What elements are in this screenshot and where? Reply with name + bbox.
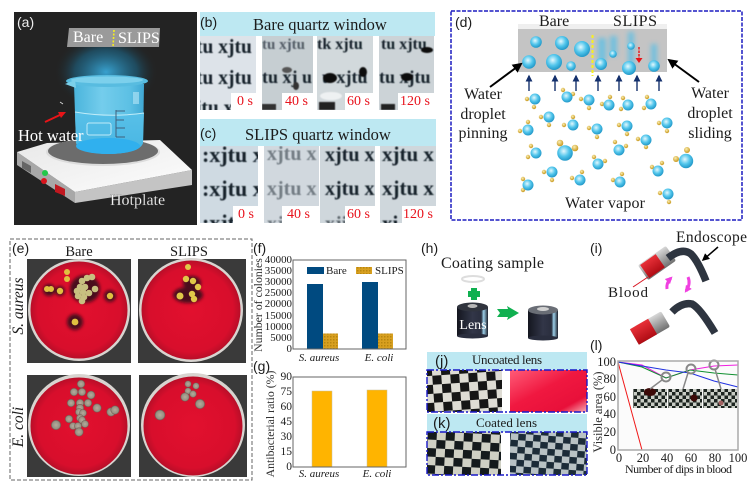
y ticks l: 0 <box>610 443 616 457</box>
label g: (g) <box>253 358 270 374</box>
hot water label: Hot water <box>18 126 84 145</box>
image 40 s <box>262 36 313 110</box>
y ticks l: 40 <box>604 407 616 421</box>
image 60 s <box>317 36 373 110</box>
panel k: coated lens views <box>427 414 587 475</box>
time labels b <box>231 93 434 110</box>
y ticks g: 75 <box>280 386 292 398</box>
row s. aureus: S. aureus <box>10 277 27 335</box>
panel g: antibacterial ratio bar chart <box>253 358 406 480</box>
x ticks l: 20 <box>637 451 649 465</box>
time labels c: 40 s <box>287 207 310 222</box>
coating sample title: Coating sample <box>441 255 544 272</box>
x ticks l: 60 <box>685 451 697 465</box>
time labels c <box>233 206 436 223</box>
legend f: SLIPS <box>375 265 404 277</box>
y ticks g: 45 <box>280 416 292 428</box>
x ticks l: 80 <box>709 451 721 465</box>
red arrow <box>45 102 66 122</box>
image 60 s: xjtu x <box>325 178 374 200</box>
slips label d: SLIPS <box>613 13 657 30</box>
blood label: Blood <box>608 285 648 301</box>
column bare: Bare <box>65 244 93 260</box>
green plus <box>468 288 480 300</box>
panel j: uncoated lens views <box>427 352 587 412</box>
axes g <box>293 377 406 467</box>
image 60 s: xjtu x <box>325 144 374 166</box>
lower endoscope <box>672 304 715 333</box>
y ticks l: 60 <box>604 390 616 404</box>
y ticks f: 35000 <box>265 265 293 277</box>
time labels b: 60 s <box>347 94 370 109</box>
panel b: bare quartz window <box>196 12 435 119</box>
y ticks g: 90 <box>280 371 292 383</box>
endoscope arrow <box>703 247 718 260</box>
sliding label: Water <box>691 85 729 102</box>
label c: (c) <box>200 125 216 141</box>
hotplate label: Hotplate <box>110 192 165 209</box>
label h: (h) <box>421 240 438 256</box>
panel h: coating a lens <box>421 240 558 340</box>
y ticks l: 100 <box>597 355 616 369</box>
x ticks l: 40 <box>661 451 673 465</box>
label f: (f) <box>253 240 266 256</box>
pinning label: droplet <box>460 106 506 123</box>
x ticks l: 0 <box>616 451 622 465</box>
checkerboard k right <box>510 432 587 475</box>
image 120 s: xjtu x <box>382 142 434 166</box>
bare slips window <box>67 28 160 47</box>
image 120 s <box>379 36 434 110</box>
y ticks f: 40000 <box>265 254 293 266</box>
x label aureus g: S. aureus <box>299 468 339 480</box>
uncoated lens: Lens <box>459 318 487 333</box>
row e. coli: E. coli <box>10 407 27 448</box>
header j <box>427 352 587 370</box>
image 120 s: tu xjtu <box>381 36 427 53</box>
image 0 s <box>196 36 256 119</box>
panel d: condensation schematic <box>451 11 742 220</box>
bars f <box>307 282 393 349</box>
header c <box>200 119 436 146</box>
x ticks l <box>616 451 747 465</box>
label i: (i) <box>590 240 602 256</box>
label b: (b) <box>200 14 217 30</box>
label l: (l) <box>590 337 602 353</box>
series lines <box>618 362 738 450</box>
image 0 s: :xjtu <box>202 210 247 235</box>
label j: (j) <box>435 353 448 370</box>
window <box>518 29 667 72</box>
image 0 s: :xjtu x <box>202 142 264 167</box>
magenta arrows <box>667 277 689 291</box>
image 0 s: tu xjtu <box>196 37 252 58</box>
window top strip <box>518 24 667 29</box>
x labels f: S. aureus <box>299 352 339 364</box>
time labels b: 120 s <box>400 94 430 109</box>
plot background <box>618 361 738 450</box>
image 40 s: xjtu x <box>267 178 316 200</box>
header k <box>427 414 587 432</box>
image 60 s <box>320 144 375 235</box>
time labels c: 120 s <box>403 207 433 222</box>
y ticks f: 15000 <box>265 310 293 322</box>
image 40 s: xjtu x <box>267 143 316 165</box>
endoscope title: Endoscope <box>676 229 747 246</box>
upper endoscope <box>668 251 706 281</box>
panel a: beaker on hotplate <box>14 12 197 225</box>
image 120 s <box>380 142 436 235</box>
panel f: number of colonies bar chart <box>251 240 406 364</box>
label k: (k) <box>433 415 450 432</box>
image 120 s: xi <box>382 211 398 235</box>
title k: Coated lens <box>476 415 537 430</box>
image 40 s: tu xjtu <box>262 37 305 53</box>
image 120 s: xjtu x <box>382 176 434 200</box>
pinning label: pinning <box>459 125 507 142</box>
image 0 s: itu x <box>196 98 234 119</box>
y ticks f: 25000 <box>265 287 293 299</box>
vapor arrows <box>529 76 659 91</box>
label e: (e) <box>12 240 29 256</box>
time labels c: 0 s <box>238 207 254 222</box>
x label coli g: E. coli <box>362 468 391 480</box>
image 0 s: :xjtu x <box>202 176 264 201</box>
bare slips window: Bare <box>73 29 103 46</box>
upper vial <box>638 246 676 280</box>
sliding label: droplet <box>687 105 733 122</box>
beaker <box>65 75 148 154</box>
frame l <box>618 361 738 450</box>
plate: aureus slips <box>138 258 246 363</box>
y axis title l: Visible area (%) <box>591 371 605 453</box>
title b: Bare quartz window <box>253 15 387 34</box>
green arrow <box>497 306 519 320</box>
panel i: endoscope in blood <box>590 229 747 345</box>
plate: coli slips <box>139 373 247 477</box>
checkerboard j <box>427 370 502 412</box>
y ticks g: 15 <box>280 446 292 458</box>
axes f <box>293 260 406 349</box>
droplets <box>522 36 660 75</box>
dashed frame j <box>427 370 587 412</box>
image 0 s: tu xjtu <box>196 68 252 89</box>
y ticks f: 20000 <box>265 298 293 310</box>
label a: (a) <box>17 14 34 30</box>
checkerboard k left <box>427 432 501 475</box>
panel l: visible area chart <box>590 337 747 476</box>
column slips: SLIPS <box>170 244 208 260</box>
panel c: slips quartz window <box>200 119 436 235</box>
time labels b: 40 s <box>285 94 308 109</box>
y ticks g: 30 <box>280 431 292 443</box>
plate: coli bare <box>27 374 131 477</box>
pinning label: Water <box>464 86 502 103</box>
y ticks l: 80 <box>604 372 616 386</box>
hotplate <box>17 138 192 203</box>
image 0 s <box>200 142 264 235</box>
red view j <box>510 370 587 412</box>
dashed frame k <box>427 432 587 475</box>
plate: aureus bare <box>27 259 131 363</box>
image 120 s: tu xjtu <box>379 67 431 87</box>
y ticks g: 0 <box>286 461 292 473</box>
y ticks g <box>280 371 292 473</box>
panel e: blood agar plates <box>10 239 252 480</box>
y ticks f: 10000 <box>265 321 293 333</box>
x axis title l: Number of dips in blood <box>625 462 732 476</box>
glow above beaker <box>54 34 158 110</box>
water molecules <box>518 88 693 204</box>
title c: SLIPS quartz window <box>245 125 391 144</box>
title j: Uncoated lens <box>472 352 542 367</box>
sliding trails <box>598 32 657 66</box>
y ticks g: 60 <box>280 401 292 413</box>
image 40 s: tu xj u <box>262 67 312 87</box>
label d: (d) <box>455 14 472 30</box>
image 40 s: xji <box>267 213 290 235</box>
y ticks l: 20 <box>604 425 616 439</box>
y axis title g: Antibacterial ratio (%) <box>263 371 277 477</box>
legend f: Bare <box>326 265 347 277</box>
coating ring <box>462 276 484 282</box>
divider <box>592 35 594 76</box>
magnifier callouts <box>650 360 721 389</box>
blood pointer <box>633 277 648 287</box>
bare label d: Bare <box>539 13 569 30</box>
image 40 s <box>264 143 319 235</box>
image 60 s: u xjtu <box>322 67 368 87</box>
y ticks l <box>597 355 616 457</box>
bare slips window: SLIPS <box>118 30 160 47</box>
time labels b: 0 s <box>237 94 253 109</box>
water vapor label: Water vapor <box>565 195 646 212</box>
black callout arrows <box>490 60 699 87</box>
sliding label: sliding <box>688 125 732 142</box>
y axis title f: Number of colonies <box>251 258 265 352</box>
bars g <box>312 390 387 467</box>
red slide arrow <box>636 47 642 63</box>
x label e coli f: E. coli <box>364 352 393 364</box>
legend f <box>307 265 404 277</box>
y ticks f: 30000 <box>265 276 293 288</box>
x ticks l: 100 <box>729 451 747 465</box>
y ticks f: 0 <box>287 343 293 355</box>
header b <box>200 12 435 36</box>
image 60 s: xji <box>325 213 348 235</box>
coated lens <box>528 306 558 340</box>
inset images <box>633 388 737 408</box>
lower vial <box>630 311 670 345</box>
y ticks f: 5000 <box>270 332 293 344</box>
time labels c: 60 s <box>347 207 370 222</box>
image 60 s: tk xjtu <box>317 36 363 53</box>
y ticks f <box>265 254 293 355</box>
